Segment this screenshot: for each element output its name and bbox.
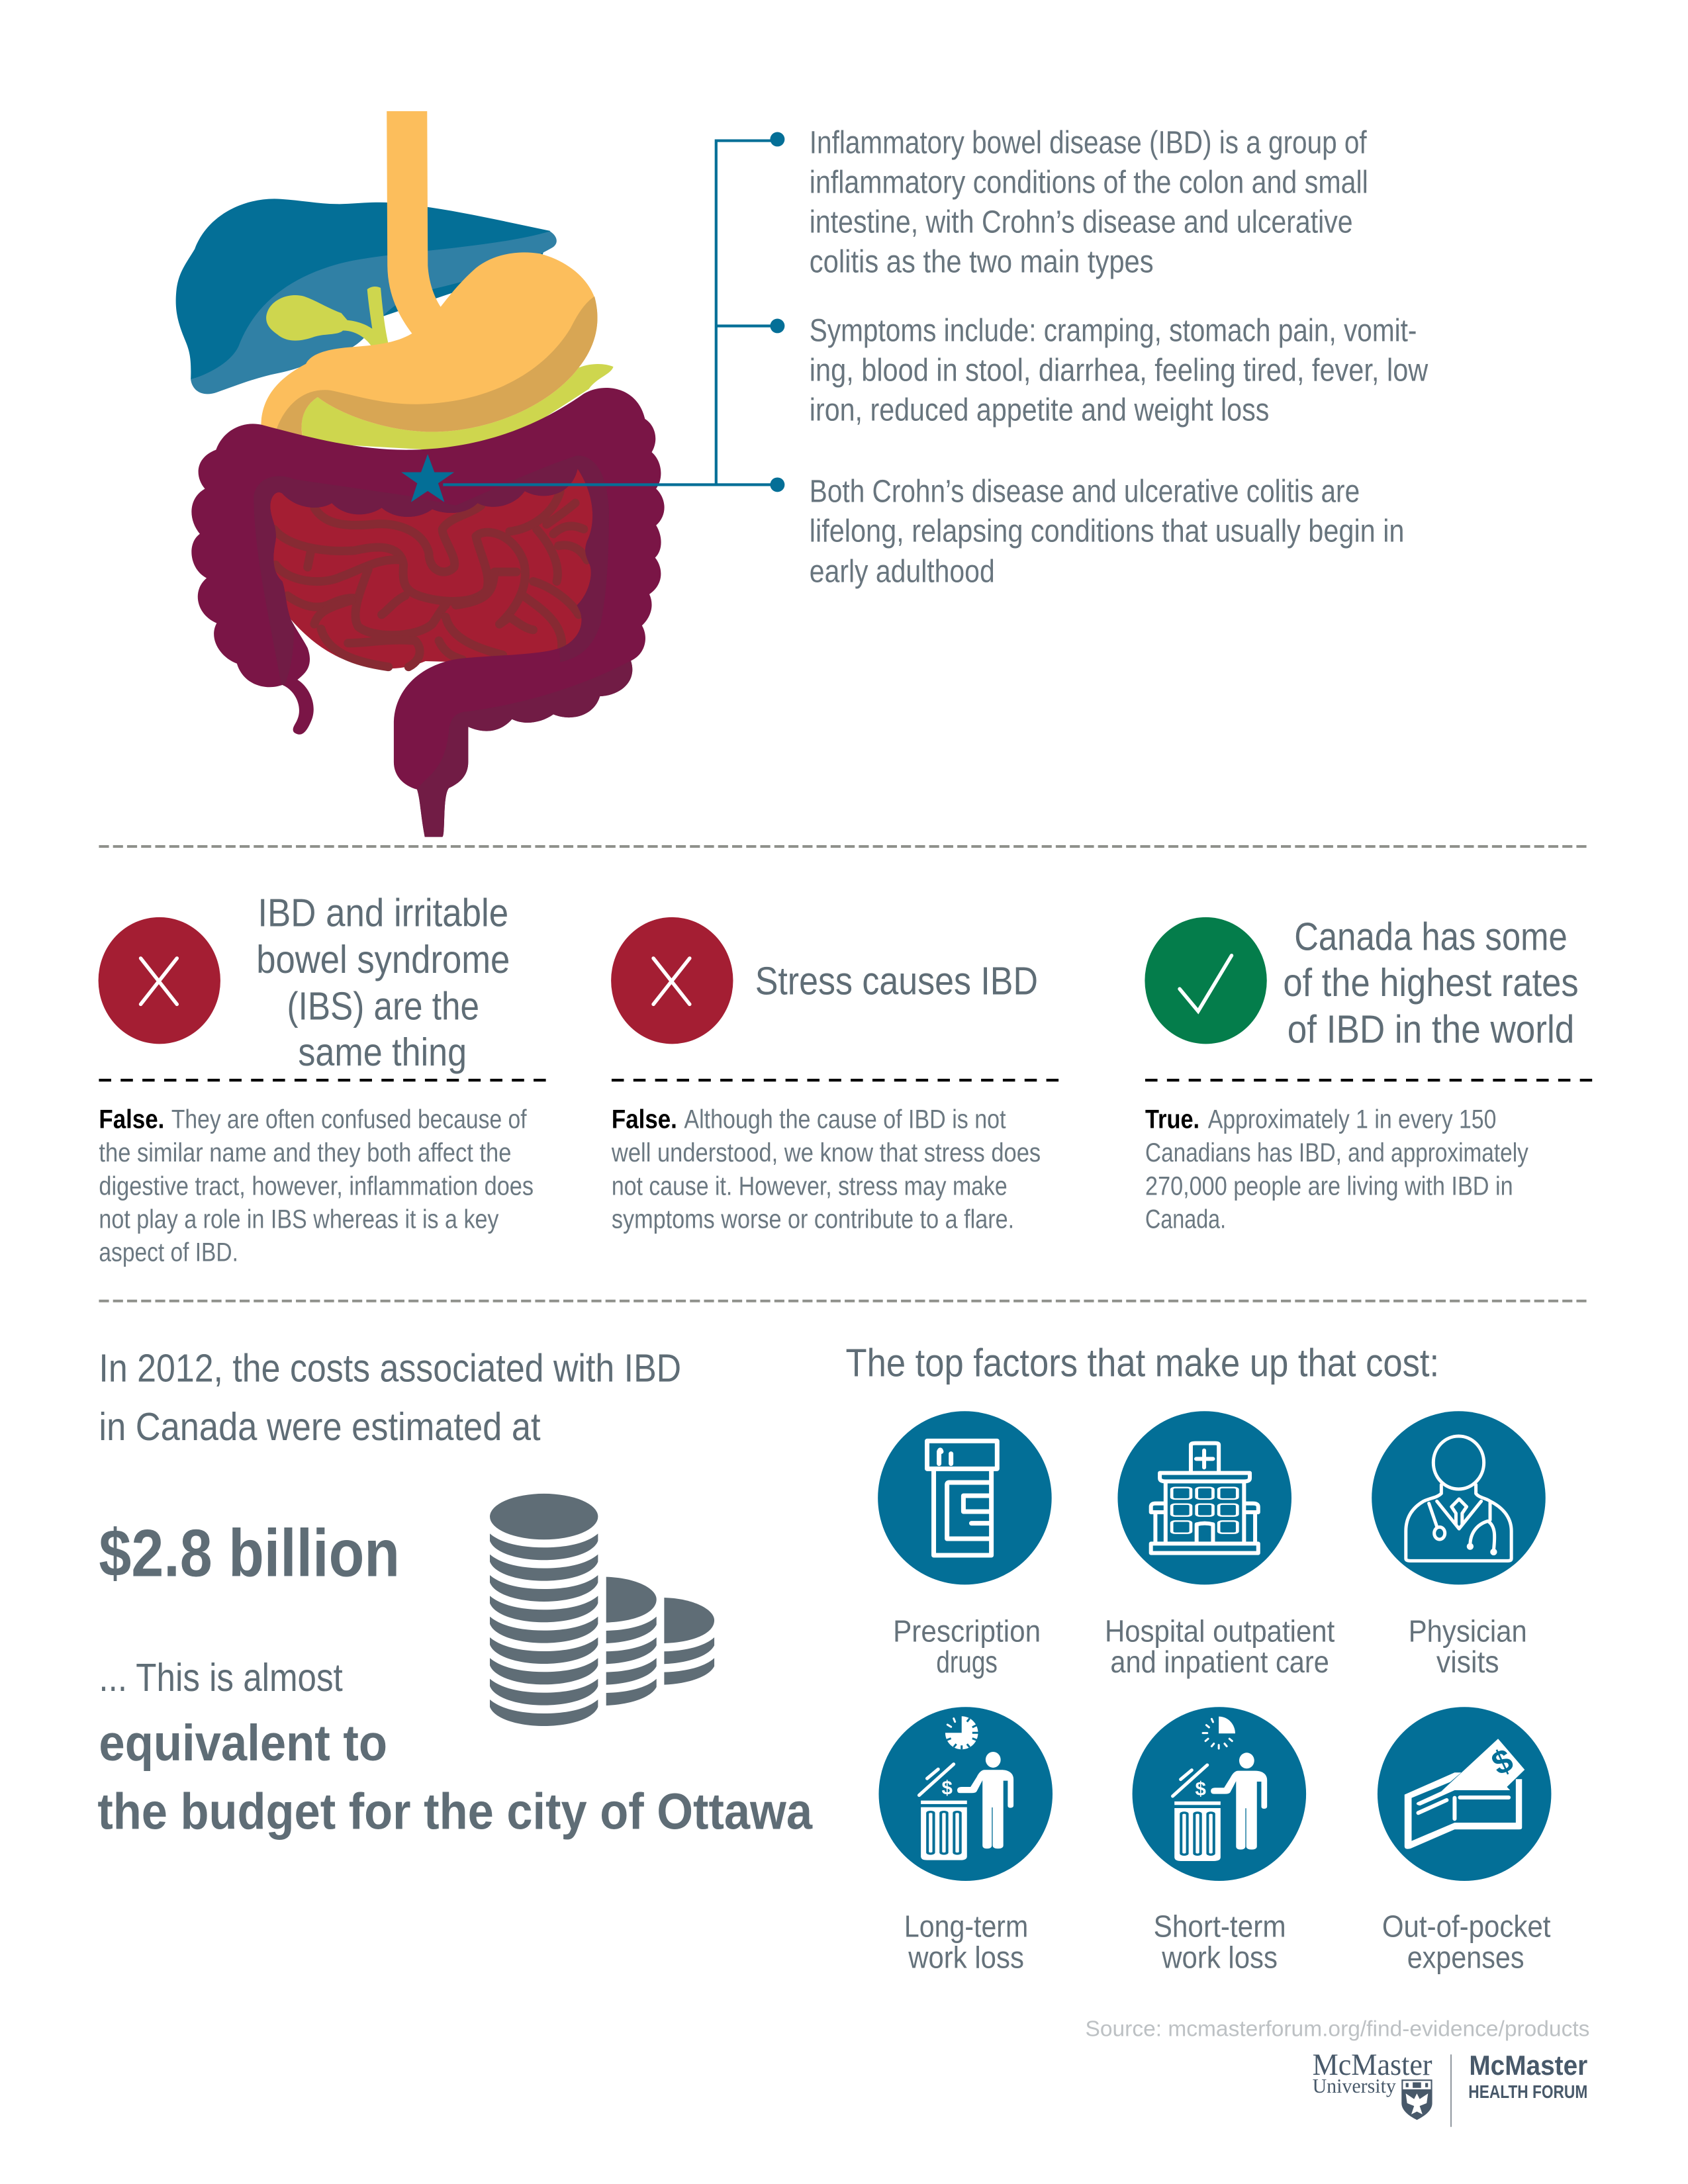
heading: fact 3	[1283, 915, 1579, 1051]
text block: definition: intestine, with Crohn’s disease and ulcerative	[810, 205, 1353, 240]
icon: red X	[611, 917, 733, 1044]
label: and inpatient care	[1110, 1645, 1329, 1679]
heading: myth 1: (IBS) are the	[287, 985, 479, 1028]
body: fact 3: Approximately 1 in every 150	[1208, 1105, 1496, 1134]
label: expenses	[1407, 1940, 1524, 1974]
text block: definition: Inflammatory bowel disease (IBD) is a group of	[810, 126, 1367, 161]
heading: myth 2: Stress causes IBD	[755, 960, 1038, 1003]
text: cost intro	[99, 1347, 681, 1449]
text block: lifelong conditions	[810, 475, 1404, 590]
factor: physician visits	[1372, 1411, 1546, 1679]
icon: red X	[99, 917, 220, 1044]
label	[1154, 1909, 1286, 1974]
icon: worker with three-quarter clock: $	[941, 1778, 953, 1799]
body: myth 2: symptoms worse or contribute to a flare.	[612, 1205, 1014, 1234]
icon: wallet with bill	[1378, 1707, 1551, 1881]
body: myth 2: Although the cause of IBD is not	[684, 1105, 1006, 1134]
body: myth 1: the similar name and they both affect the	[99, 1138, 511, 1167]
factor: prescription drugs	[878, 1411, 1052, 1679]
label	[1382, 1909, 1551, 1974]
logo: McMaster University	[1313, 2048, 1432, 2120]
heading: fact 3: of the highest rates	[1283, 962, 1579, 1005]
label	[904, 1909, 1028, 1974]
icon: worker with quarter clock	[1133, 1707, 1306, 1881]
label	[893, 1614, 1041, 1679]
label: visits	[1436, 1645, 1499, 1679]
heading: myth 1: IBD and irritable	[258, 892, 508, 935]
text block: symptoms: Symptoms include: cramping, stomach pain, vomit-	[810, 314, 1417, 349]
label: work loss	[1161, 1940, 1278, 1974]
label: Out-of-pocket	[1382, 1909, 1551, 1944]
body: fact 3	[1145, 1105, 1528, 1234]
label: Physician	[1409, 1614, 1527, 1648]
logo: McMaster Health Forum: McMaster	[1469, 2050, 1587, 2081]
text block: lifelong conditions: Both Crohn’s disease and ulcerative colitis are	[810, 475, 1360, 510]
text block: definition: inflammatory conditions of the colon and small	[810, 165, 1368, 200]
pancreas	[302, 364, 614, 453]
icon: pill bottle	[878, 1411, 1052, 1584]
heading: fact 3: of IBD in the world	[1288, 1008, 1574, 1051]
panel: cost	[97, 1347, 813, 1840]
panel: cost factors	[846, 1342, 1551, 1974]
logo: McMaster Health Forum: HEALTH FORUM	[1468, 2081, 1587, 2102]
body: fact 3: Canada.	[1145, 1205, 1226, 1234]
esophagus and stomach	[261, 111, 598, 438]
factor: long-term work loss	[879, 1707, 1053, 1974]
text: comparison	[97, 1657, 813, 1840]
text: comparison: the budget for the city of Ottawa	[97, 1783, 813, 1840]
icon: star marking location	[401, 454, 454, 502]
icon: crest	[1401, 2079, 1432, 2120]
body: myth 1: not play a role in IBS whereas it is a key	[99, 1205, 499, 1234]
body: myth 2: well understood, we know that stress does	[611, 1138, 1041, 1167]
icon: worker with quarter clock: $	[1196, 1778, 1206, 1800]
body: myth 2: False.	[612, 1105, 677, 1134]
icon: coin stacks	[490, 1494, 714, 1726]
body: myth 1: They are often confused because of	[171, 1105, 527, 1134]
source line: Source: mcmasterforum.org/find-evidence/products	[1086, 2017, 1589, 2042]
factor: out-of-pocket expenses	[1378, 1707, 1551, 1974]
body: fact 3: 270,000 people are living with IBD in	[1145, 1171, 1513, 1201]
icon: worker with three-quarter clock	[879, 1707, 1053, 1881]
body: myth 1: False.	[99, 1105, 164, 1134]
panel: fact 3	[1145, 915, 1593, 1234]
text: comparison: ... This is almost	[99, 1657, 343, 1700]
icon: green check	[1145, 917, 1267, 1044]
text: cost intro: In 2012, the costs associated with IBD	[99, 1347, 681, 1390]
label: work loss	[908, 1940, 1024, 1974]
body: myth 2: not cause it. However, stress may make	[612, 1171, 1008, 1201]
label	[1105, 1614, 1335, 1679]
label: Hospital outpatient	[1105, 1614, 1335, 1648]
panel: myth 2	[611, 917, 1058, 1234]
text: comparison: equivalent to	[99, 1715, 387, 1772]
big number: $2.8 billion	[99, 1516, 400, 1590]
logo: McMaster Health Forum	[1468, 2050, 1587, 2102]
connector lines	[443, 132, 784, 492]
heading: myth 1: bowel syndrome	[256, 938, 510, 981]
body: myth 1	[99, 1105, 534, 1267]
factor: short-term work loss	[1133, 1707, 1306, 1974]
body: myth 2	[611, 1105, 1041, 1234]
panel: anatomy illustration	[176, 111, 665, 842]
heading: myth 1: same thing	[298, 1031, 467, 1074]
body: fact 3: True.	[1145, 1105, 1199, 1134]
heading: fact 3: Canada has some	[1294, 915, 1568, 958]
text block: definition	[810, 126, 1368, 280]
icon: hospital	[1117, 1411, 1291, 1584]
factor: hospital care	[1105, 1411, 1335, 1679]
text block: definition: colitis as the two main types	[810, 245, 1154, 280]
text block: symptoms: ing, blood in stool, diarrhea, feeling tired, fever, low	[810, 353, 1429, 388]
text: cost intro: in Canada were estimated at	[99, 1406, 541, 1449]
label: drugs	[936, 1645, 998, 1679]
heading: cost factors: The top factors that make up that cost:	[846, 1342, 1439, 1385]
text block: lifelong conditions: early adulthood	[810, 555, 995, 590]
text block: lifelong conditions: lifelong, relapsing conditions that usually begin in	[810, 514, 1404, 549]
label	[1409, 1614, 1527, 1679]
gallbladder	[266, 287, 389, 346]
panel: myth 1	[99, 892, 546, 1267]
icon: doctor	[1372, 1411, 1546, 1584]
logo: McMaster University: University	[1313, 2075, 1397, 2097]
body: myth 1: aspect of IBD.	[99, 1238, 238, 1267]
large intestine	[191, 388, 665, 842]
text block: symptoms: iron, reduced appetite and weight loss	[810, 393, 1269, 428]
label: Short-term	[1154, 1909, 1286, 1944]
body: fact 3: Canadians has IBD, and approximately	[1145, 1138, 1528, 1167]
text block: symptoms	[810, 314, 1429, 428]
label: Long-term	[904, 1909, 1028, 1944]
small intestine	[267, 463, 597, 668]
liver	[176, 199, 557, 394]
body: myth 1: digestive tract, however, inflammation does	[99, 1171, 534, 1201]
icon: wallet with bill: $	[1486, 1741, 1519, 1782]
label: Prescription	[893, 1614, 1041, 1648]
heading: myth 1	[256, 892, 510, 1074]
logo: McMaster University: McMaster	[1313, 2048, 1432, 2082]
